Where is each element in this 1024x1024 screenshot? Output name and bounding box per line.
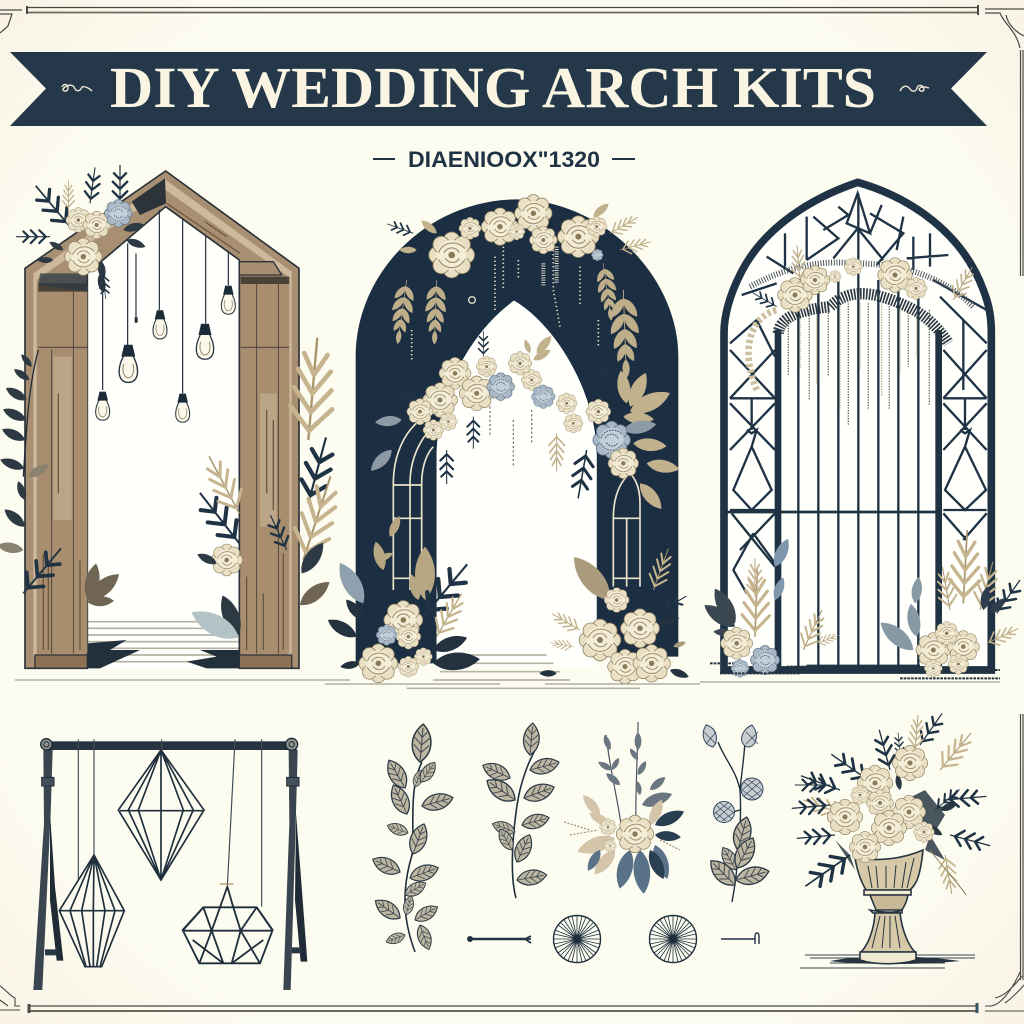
hanging swing frame with geometric lanterns [33,738,307,990]
lantern: upper diamond [118,750,204,880]
hanging branches and strands [385,247,644,379]
right base bouquet [876,529,1024,678]
right hook tool [721,933,759,944]
title text: DIY WEDDING ARCH KITS [110,55,876,120]
right foliage [187,336,348,646]
corner flowers [16,165,147,299]
top garland [749,244,979,390]
timber frame [25,171,299,668]
urn [855,850,923,964]
opening [87,207,239,668]
floral spray [564,722,687,895]
subtitle dimension line: DIAENIOOX"1320 [408,147,600,172]
top garland [385,195,653,278]
hanging cords [78,739,262,907]
floor stripes [87,622,239,668]
left base bouquet [700,536,840,677]
hanging strands [788,303,929,425]
berry sprig with mesh leaves [703,725,771,902]
inner garland [367,331,681,513]
urn shadow [800,955,975,968]
left hook tool [468,936,531,943]
white interior [437,301,597,667]
inner post leaves [81,562,124,607]
frame [33,738,307,990]
wire wheel 1 [554,916,600,962]
lantern: lower faceted [59,855,124,967]
left foliage [0,350,124,607]
flower arrangement in urn [791,709,992,968]
foliage spray [791,709,992,895]
blooms [827,745,934,863]
left floor bouquet [325,514,481,683]
right floor bouquet [539,546,690,684]
lantern: hexagonal geometric [183,884,273,963]
arch 1: rustic wooden arch [0,165,348,668]
floor [407,655,640,688]
arch 2: navy panel arch [325,195,690,688]
ground line [15,680,1000,684]
navy panel [356,199,678,663]
wire wheel 2 [650,916,696,962]
arch 3: gothic metal lattice arch [700,182,1024,678]
banner ornaments [62,84,929,91]
title banner [10,52,987,126]
leaf sprig 2 [480,722,561,898]
leaf sprig 1 [370,723,455,952]
frame and lattice [724,182,991,670]
mesh shapes [703,725,763,822]
hanging bulbs [96,210,235,422]
inner metal frames [393,420,640,590]
